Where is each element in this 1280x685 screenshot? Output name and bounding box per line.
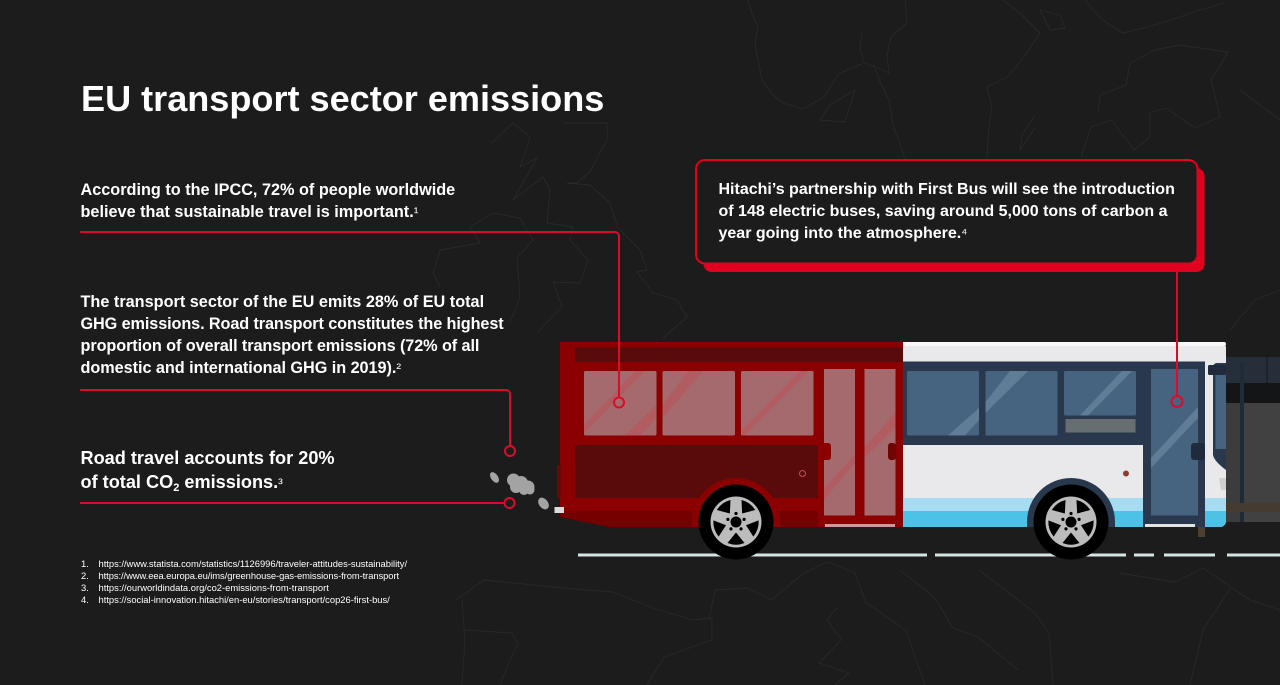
callout: Hitachi and First Bus partnership: year going into the atmosphere.⁴ bbox=[718, 225, 967, 242]
text block: IPCC statement: believe that sustainable travel is important.¹ bbox=[80, 203, 419, 221]
title: EU transport sector emissions bbox=[81, 78, 604, 119]
footnotes: https://social-innovation.hitachi/en-eu/stories/transport/cop26-first-bus/ bbox=[98, 594, 390, 605]
leader line: callout to bus door bbox=[1172, 270, 1182, 407]
footnotes: 2. bbox=[81, 570, 89, 581]
bus: white and blue real side bbox=[903, 342, 1226, 537]
leader line: transport sector to smoke bbox=[80, 390, 515, 456]
text block: road travel CO2 share: emissions. bbox=[179, 472, 278, 492]
leader line: IPCC to bus window bbox=[80, 232, 624, 408]
background map of Europe bbox=[433, 0, 1280, 685]
door glass bbox=[824, 369, 855, 516]
text block: transport sector share: proportion of overall transport emissions (72% of all bbox=[80, 337, 479, 355]
text block: road travel CO2 share: 2 bbox=[173, 482, 179, 494]
footnotes: 4. bbox=[81, 594, 89, 605]
road markings bbox=[578, 554, 1280, 556]
text block: road travel CO2 share: of total CO bbox=[80, 472, 173, 492]
footnotes: 1. bbox=[81, 558, 89, 569]
door frame bbox=[1143, 362, 1205, 527]
door glass bbox=[1151, 369, 1198, 516]
callout: Hitachi and First Bus partnership: Hitachi’s partnership with First Bus will see the introduction bbox=[718, 181, 1175, 198]
callout: Hitachi and First Bus partnership bbox=[696, 160, 1204, 272]
footnotes bbox=[81, 558, 407, 605]
text block: road travel CO2 share: Road travel accounts for 20% bbox=[80, 448, 335, 468]
text block: road travel CO2 share: ³ bbox=[278, 475, 283, 491]
footnotes: 3. bbox=[81, 582, 89, 593]
window reflections bbox=[584, 371, 645, 433]
leader line: road travel to smoke bbox=[80, 498, 514, 508]
text block: transport sector share: The transport sector of the EU emits 28% of EU total bbox=[80, 293, 484, 311]
exhaust smoke bbox=[488, 471, 551, 511]
wheel arch: red side bbox=[692, 478, 780, 527]
bus: red highlighted side bbox=[557, 342, 903, 527]
text block: IPCC statement bbox=[80, 181, 455, 221]
footnotes: https://ourworldindata.org/co2-emissions-from-transport bbox=[98, 582, 329, 593]
callout: Hitachi and First Bus partnership: of 148 electric buses, saving around 5,000 tons of carbon a bbox=[718, 203, 1168, 220]
text block: transport sector share: GHG emissions. Road transport constitutes the highest bbox=[80, 315, 504, 333]
windows bbox=[584, 371, 656, 436]
wheel: rear bbox=[698, 484, 774, 560]
window reflections bbox=[948, 408, 979, 436]
text block: road travel CO2 share bbox=[80, 448, 335, 494]
text block: transport sector share: domestic and international GHG in 2019).² bbox=[80, 359, 401, 377]
bus interior seen through the front bbox=[1226, 357, 1280, 522]
exhaust pipe bbox=[554, 507, 564, 513]
text block: IPCC statement: According to the IPCC, 72% of people worldwide bbox=[80, 181, 455, 199]
text block: transport sector share bbox=[80, 293, 504, 377]
footnotes: https://www.eea.europa.eu/ims/greenhouse-gas-emissions-from-transport bbox=[98, 570, 399, 581]
footnotes: https://www.statista.com/statistics/1126996/traveler-attitudes-sustainability/ bbox=[98, 558, 407, 569]
windshield bbox=[1213, 363, 1226, 470]
wheel: front bbox=[1034, 484, 1108, 560]
wheel arch: white side bbox=[1027, 478, 1115, 527]
windows bbox=[907, 371, 979, 436]
